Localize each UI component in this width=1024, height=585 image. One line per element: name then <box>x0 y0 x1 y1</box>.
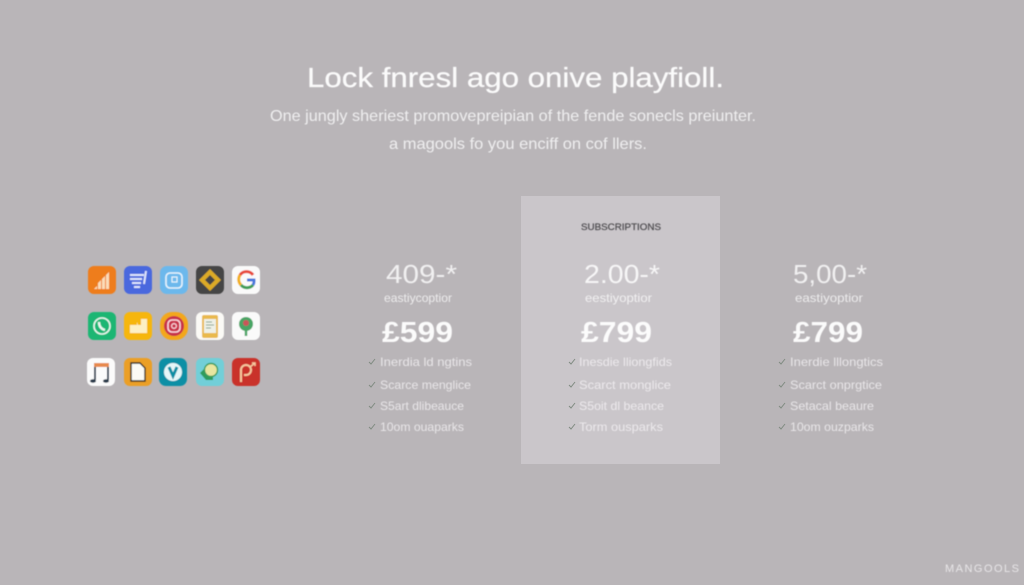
feature list: Setacal beaure <box>790 399 874 413</box>
pricing column 1 <box>369 259 472 434</box>
price: £599 <box>382 317 453 349</box>
feature list <box>369 355 472 434</box>
price: £799 <box>793 317 863 349</box>
panel: highlighted subscriptions column <box>521 196 720 464</box>
icon: yellow folder <box>124 312 152 340</box>
plan caption: eastiycoptior <box>384 291 452 305</box>
subtitle line 1: One jungly sheriest promovepreipian of the fende sonecls preiunter. <box>270 108 756 125</box>
price: £799 <box>581 317 652 349</box>
icon: orange signal bars <box>88 266 116 294</box>
icon: red P <box>232 358 260 386</box>
icon: light blue camera <box>160 266 188 294</box>
plan caption: eastiyoptior <box>795 291 863 305</box>
feature list: Scarce menglice <box>380 378 471 392</box>
feature list <box>569 355 672 434</box>
subtitle line 2: a magools fo you enciff on cof llers. <box>389 136 647 153</box>
feature list: Inesdie lliongfids <box>579 355 672 369</box>
plan quantity: 409-* <box>386 259 457 289</box>
feature list: 10om ouzparks <box>790 420 874 434</box>
feature list: S5oit dl beance <box>579 399 664 413</box>
pricing column 3 <box>779 259 883 434</box>
brand wordmark: MANGOOLS <box>945 563 1019 575</box>
feature list: S5art dlibeauce <box>380 399 464 413</box>
icon: green phone <box>88 312 116 340</box>
icon: cyan chat <box>196 358 224 386</box>
icon: orange camera circle <box>160 312 188 340</box>
feature list: Scarct monglice <box>579 378 671 392</box>
plan caption: eestiyoptior <box>585 291 652 305</box>
icon: teal V <box>159 358 187 386</box>
icon: white music <box>87 358 115 386</box>
icon: dark with yellow diamond <box>196 266 224 294</box>
icon: orange document <box>124 358 152 386</box>
feature list: Scarct onprgtice <box>790 378 882 392</box>
icon: blue cart <box>124 266 152 294</box>
feature list <box>779 355 883 434</box>
feature list: 10om ouaparks <box>380 420 464 434</box>
pricing column 2 <box>569 259 672 434</box>
title: Lock fnresl ago onive playfioll. <box>307 62 724 93</box>
plan quantity: 2.00-* <box>584 259 660 289</box>
panel heading: subscriptions: SUBSCRIPTIONS <box>581 222 661 233</box>
feature list: Inerdia ld ngtins <box>380 355 472 369</box>
feature list: Inerdie lllongtics <box>790 355 883 369</box>
icon: white tablet <box>196 312 224 340</box>
icon: white tree <box>232 312 260 340</box>
icon: white multicolour G <box>232 266 260 294</box>
feature list: Torm ousparks <box>579 420 663 434</box>
plan quantity: 5,00-* <box>793 259 867 289</box>
app icon grid <box>87 266 260 386</box>
